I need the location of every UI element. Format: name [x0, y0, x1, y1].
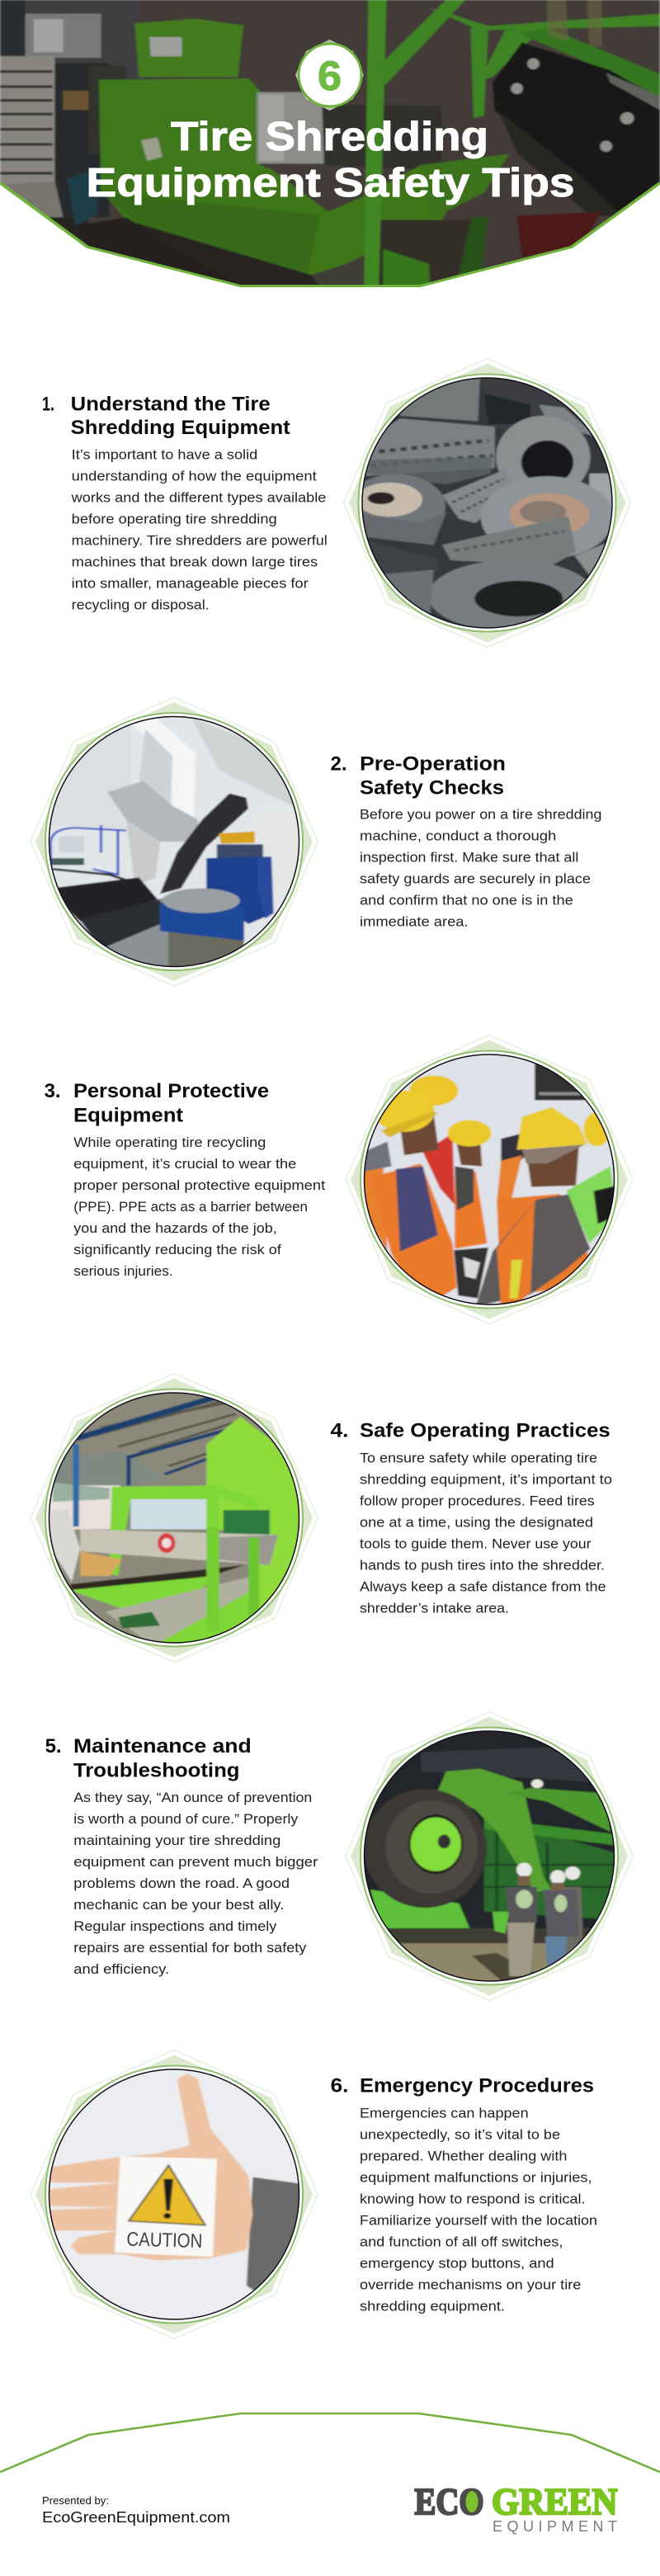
heading: tip 5 [45, 1735, 252, 1781]
heading: tip 2: 2. [330, 753, 346, 775]
panel: tip 1 text [42, 393, 328, 613]
body: tip 2: Before you power on a tire shredding [360, 808, 601, 823]
heading: tip 3: Personal Protective [73, 1080, 269, 1102]
title: Tire Shredding [171, 115, 488, 159]
body: tip 1: works and the different types available [71, 491, 326, 506]
footer outline [0, 2413, 660, 2472]
body: tip 4: Always keep a safe distance from the [360, 1579, 606, 1594]
title [86, 115, 574, 205]
body: tip 6: unexpectedly, so it’s vital to be [360, 2127, 560, 2142]
presented by [42, 2494, 230, 2526]
photo: grey tire shredding machine with blue bin [31, 697, 318, 986]
heading: tip 2 [330, 753, 506, 800]
photo: giant tire on green machine with three workers [346, 1711, 633, 2000]
body: tip 2: and confirm that no one is in the [360, 894, 573, 908]
body: tip 4: one at a time, using the designated [360, 1515, 593, 1530]
body: tip 5: equipment can prevent much bigger [73, 1855, 318, 1870]
body: tip 5: problems down the road. A good [73, 1876, 290, 1891]
badge: number 6: 6 [318, 53, 342, 99]
body: tip 4 [360, 1451, 612, 1616]
panel: tip 6 text [330, 2074, 597, 2314]
body: tip 5: mechanic can be your best ally. [73, 1898, 284, 1913]
body: tip 1 [71, 448, 328, 613]
logo: Eco Green Equipment: ECO [414, 2480, 483, 2522]
caution label: CAUTION [126, 2229, 203, 2253]
presented by: Presented by: [42, 2494, 109, 2507]
body: tip 1: recycling or disposal. [72, 598, 210, 613]
body: tip 3: significantly reducing the risk of [73, 1243, 281, 1257]
header banner with machine photo [0, 0, 660, 295]
body: tip 6: and function of all off switches, [360, 2234, 563, 2249]
body: tip 1: understanding of how the equipment [72, 469, 317, 484]
photo: workers in hard hats and orange vests [346, 1035, 633, 1323]
heading: tip 6: 6. [330, 2074, 348, 2097]
body: tip 3: proper personal protective equipment [73, 1178, 326, 1193]
logo: Eco Green Equipment: EQUIPMENT [493, 2518, 617, 2535]
heading: tip 1: 1. [42, 393, 54, 415]
heading: tip 3: 3. [45, 1080, 61, 1102]
body: tip 6: shredding equipment. [360, 2299, 505, 2314]
heading: tip 6: Emergency Procedures [360, 2074, 594, 2097]
body: tip 6: Emergencies can happen [360, 2106, 529, 2121]
photo: green conveyor shredding plant under a shed [31, 1373, 318, 1662]
panel: tip 4 text [330, 1420, 612, 1616]
heading: tip 2: Safety Checks [360, 777, 504, 800]
body: tip 2: inspection first. Make sure that all [360, 851, 578, 866]
body: tip 4: shredding equipment, it’s important to [360, 1472, 612, 1487]
body: tip 3: (PPE). PPE acts as a barrier between [73, 1200, 308, 1215]
body: tip 6 [360, 2106, 597, 2314]
body: tip 6: knowing how to respond is critical. [360, 2191, 586, 2206]
panel: tip 5 text [45, 1735, 318, 1977]
body: tip 6: override mechanisms on your tire [360, 2277, 581, 2292]
body: tip 4: To ensure safety while operating tire [360, 1451, 597, 1465]
body: tip 1: before operating tire shredding [72, 512, 277, 527]
heading: tip 4: Safe Operating Practices [360, 1420, 610, 1442]
panel: tip 2 text [330, 753, 601, 930]
body: tip 2: immediate area. [360, 915, 469, 930]
body: tip 3: serious injuries. [73, 1264, 173, 1279]
title: Equipment Safety Tips [86, 161, 574, 205]
body: tip 1: into smaller, manageable pieces for [72, 577, 309, 592]
body: tip 5: As they say, “An ounce of prevention [73, 1790, 312, 1805]
heading: tip 4: 4. [330, 1420, 348, 1442]
photo: hand holding a caution card [31, 2050, 318, 2338]
body: tip 4: tools to guide them. Never use your [360, 1536, 592, 1551]
heading: tip 5: Troubleshooting [73, 1759, 239, 1781]
body: tip 5: maintaining your tire shredding [73, 1833, 280, 1848]
body: tip 2: machine, conduct a thorough [360, 829, 556, 844]
heading: tip 3 [45, 1080, 269, 1126]
body: tip 3: equipment, it’s crucial to wear the [73, 1157, 296, 1172]
photo: pile of used tires [343, 358, 630, 647]
body: tip 5 [73, 1790, 318, 1977]
logo: Eco Green Equipment: GREEN [492, 2480, 617, 2522]
body: tip 1: machinery. Tire shredders are powerful [72, 534, 328, 549]
heading: tip 5: Maintenance and [73, 1735, 252, 1757]
body: tip 5: and efficiency. [73, 1962, 169, 1977]
heading: tip 1 [42, 393, 290, 439]
body: tip 5: is worth a pound of cure.” Properly [73, 1812, 299, 1827]
body: tip 6: equipment malfunctions or injuries, [360, 2170, 592, 2185]
heading: tip 5: 5. [45, 1735, 62, 1757]
body: tip 2: safety guards are securely in place [360, 872, 591, 887]
badge: number 6 [295, 40, 364, 111]
body: tip 4: follow proper procedures. Feed tires [360, 1493, 595, 1508]
logo: Eco Green Equipment [414, 2480, 617, 2535]
body: tip 4: shredder’s intake area. [360, 1601, 509, 1616]
body: tip 2 [360, 808, 601, 930]
body: tip 1: machines that break down large tires [72, 555, 318, 570]
heading: tip 1: Shredding Equipment [71, 417, 290, 439]
body: tip 6: prepared. Whether dealing with [360, 2149, 568, 2163]
heading: tip 1: Understand the Tire [71, 393, 271, 415]
body: tip 6: Familiarize yourself with the location [360, 2213, 597, 2228]
body: tip 5: repairs are essential for both safety [73, 1941, 307, 1956]
body: tip 4: hands to push tires into the shredder. [360, 1558, 605, 1573]
presented by: EcoGreenEquipment.com [42, 2509, 230, 2526]
body: tip 1: It’s important to have a solid [72, 448, 257, 463]
body: tip 5: Regular inspections and timely [73, 1919, 277, 1934]
icon: leaf [465, 2491, 478, 2512]
heading: tip 2: Pre-Operation [360, 753, 506, 775]
body: tip 3: While operating tire recycling [73, 1135, 266, 1150]
body: tip 3: you and the hazards of the job, [73, 1221, 277, 1236]
body: tip 3 [73, 1135, 326, 1279]
body: tip 6: emergency stop buttons, and [360, 2256, 554, 2271]
heading: tip 3: Equipment [73, 1104, 183, 1126]
panel: tip 3 text [45, 1080, 326, 1279]
